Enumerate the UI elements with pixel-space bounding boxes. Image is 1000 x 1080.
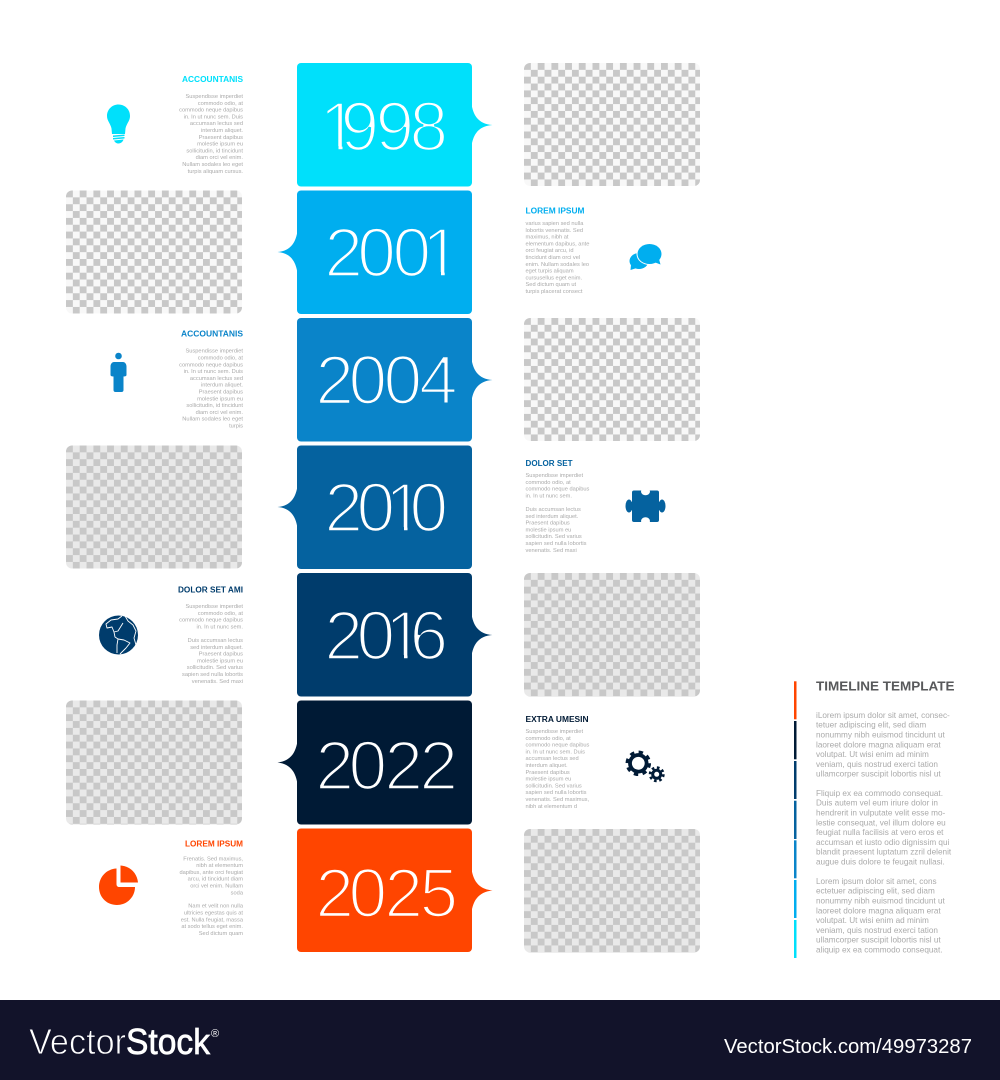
text block 2022 extra umesin: nibh at elementum d <box>526 804 577 810</box>
text block 2016 dolor set ami: in. In ut nunc sem. <box>197 624 243 630</box>
year block 2025 <box>297 828 492 952</box>
text block 2016 dolor set ami: Duis accumsan lectus <box>188 638 243 644</box>
text block 2004 accountanis <box>179 330 244 430</box>
sidebar text: laoreet dolore magna aliquam erat <box>816 906 941 915</box>
sidebar text: ullamcorper suscipit lobortis nisl ut <box>816 770 941 779</box>
text block 2001 lorem ipsum: enim. Nullam sodales leo <box>526 262 589 268</box>
text block 2010 dolor set: Suspendisse imperdiet <box>526 473 583 479</box>
icon: person <box>110 353 126 392</box>
text block 2016 dolor set ami: sed interdum aliquet. <box>190 645 243 651</box>
text block 2004 accountanis: molestie ipsum eu <box>197 396 243 402</box>
text block 2004 accountanis: Suspendisse imperdiet <box>185 349 243 355</box>
year block 2010 <box>278 446 472 569</box>
image placeholder left 6 <box>66 700 242 824</box>
text block 2022 extra umesin: interdum aliquet. <box>526 763 568 769</box>
text block 2025 lorem ipsum: nibh at elementum <box>196 863 243 869</box>
text block 2001 lorem ipsum: LOREM IPSUM <box>526 206 585 216</box>
text block 1998 accountanis: Praesent dapibus <box>199 135 243 141</box>
icon: pie chart <box>99 866 138 905</box>
text block 2025 lorem ipsum: Nam et velit non nulla <box>188 904 244 910</box>
text block 2016 dolor set ami: sapien sed nulla lobortis <box>182 672 243 678</box>
text block 2022 extra umesin: accumsan lectus sed <box>526 756 579 762</box>
text block 2016 dolor set ami: venenatis. Sed maxi <box>192 679 243 685</box>
year block 2004: 2004 <box>315 341 458 419</box>
text block 1998 accountanis: Suspendisse imperdiet <box>185 94 243 100</box>
year block 2022 <box>278 700 472 824</box>
sidebar text: iLorem ipsum dolor sit amet, consec- <box>816 711 950 720</box>
text block 2010 dolor set: sollicitudin. Sed varius <box>526 534 582 540</box>
footer logo: ® <box>211 1028 219 1040</box>
icon: puzzle piece <box>626 488 666 525</box>
year block 2016 <box>297 573 492 696</box>
year block 2001 <box>278 190 472 314</box>
text block 2022 extra umesin: sapien sed nulla lobortis <box>526 790 587 796</box>
sidebar text <box>816 711 952 954</box>
text block 2025 lorem ipsum: soda <box>231 890 244 896</box>
text block 2004 accountanis: in. In ut nunc sem. Duis <box>184 369 243 375</box>
text block 2010 dolor set: commodo odio, at <box>526 480 571 486</box>
text block 1998 accountanis <box>179 75 244 175</box>
sidebar text: Fliquip ex ea commodo consequat. <box>816 789 943 798</box>
image placeholder right 1 <box>524 63 700 186</box>
sidebar text: blandit praesent luptatum zzril delenit <box>816 848 952 857</box>
text block 2001 lorem ipsum: turpis placerat consect <box>526 289 583 295</box>
text block 2010 dolor set: venenatis. Sed maxi <box>526 548 577 554</box>
year block 2001: 2001 <box>324 213 461 291</box>
text block 2025 lorem ipsum: Frenatis. Sed maximus, <box>183 856 243 862</box>
text block 2001 lorem ipsum: lobortis venenatis. Sed <box>526 228 583 234</box>
sidebar text: volutpat. Ut wisi enim ad minim <box>816 916 929 925</box>
sidebar text: feugiat nulla facilisis at vero eros et <box>816 828 944 837</box>
text block 2025 lorem ipsum: orci vel enim. Nullam <box>190 884 243 890</box>
footer logo: Vector <box>29 1021 126 1062</box>
text block 2001 lorem ipsum: maximus, nibh at <box>526 235 569 241</box>
text block 2016 dolor set ami: molestie ipsum eu <box>197 658 243 664</box>
text block 2004 accountanis: turpis <box>229 424 243 430</box>
text block 1998 accountanis: commodo odio, at <box>198 101 243 107</box>
text block 2001 lorem ipsum: orci feugiat arcu, id <box>526 248 574 254</box>
text block 2025 lorem ipsum: Sed dictum quam <box>199 931 243 937</box>
image placeholder right 7 <box>524 829 700 952</box>
text block 2004 accountanis: accumsan lectus sed <box>190 376 243 382</box>
text block 2022 extra umesin: sollicitudin. Sed varius <box>526 783 582 789</box>
sidebar text: tetuer adipiscing elit, sed diam <box>816 721 926 730</box>
text block 1998 accountanis: interdum aliquet. <box>201 128 243 134</box>
year block 2022: 2022 <box>315 726 458 804</box>
sidebar text: aliquip ex ea commodo consequat. <box>816 945 943 954</box>
year block 2025: 2025 <box>315 854 458 932</box>
footer logo: Stock <box>126 1021 211 1062</box>
text block 2025 lorem ipsum: est. Nulla feugiat, massa <box>181 917 244 923</box>
footer bar <box>0 1000 1000 1080</box>
sidebar text: ectetuer adipiscing elit, sed diam <box>816 887 935 896</box>
sidebar text: hendrerit in vulputate velit esse mo- <box>816 809 946 818</box>
sidebar text: ullamcorper suscipit lobortis nisl ut <box>816 936 941 945</box>
text block 2022 extra umesin: Praesent dapibus <box>526 770 570 776</box>
text block 2022 extra umesin: molestie ipsum eu <box>526 777 571 783</box>
text block 2022 extra umesin: EXTRA UMESIN <box>526 715 589 724</box>
text block 1998 accountanis: sollicitudin, id tincidunt <box>186 148 243 154</box>
image placeholder left 2 <box>66 190 242 314</box>
year block 2010: 2010 <box>324 468 448 546</box>
year block 1998: 1998 <box>320 87 448 165</box>
text block 2010 dolor set: DOLOR SET <box>526 459 573 468</box>
footer logo <box>29 1021 219 1062</box>
sidebar text: accumsan et iusto odio dignissim qui <box>816 838 950 847</box>
text block 2001 lorem ipsum: cursusellus eget enim. <box>526 275 583 281</box>
text block 2025 lorem ipsum: dapibus, ante orci feugiat <box>179 870 243 876</box>
text block 1998 accountanis: molestie ipsum eu <box>197 142 243 148</box>
sidebar text: volutpat. Ut wisi enim ad minim <box>816 750 929 759</box>
text block 2025 lorem ipsum <box>179 840 244 937</box>
image placeholder right 5 <box>524 573 700 696</box>
text block 1998 accountanis: commodo neque dapibus <box>179 108 243 114</box>
text block 2016 dolor set ami: commodo odio, at <box>198 611 243 617</box>
text block 2016 dolor set ami: sollicitudin. Sed varius <box>187 665 243 671</box>
text block 2025 lorem ipsum: arcu, id tincidunt diam <box>188 877 243 883</box>
text block 2022 extra umesin: commodo neque dapibus <box>526 743 590 749</box>
sidebar text: laoreet dolore magna aliquam erat <box>816 740 941 749</box>
text block 2001 lorem ipsum: eget turpis aliquam <box>526 269 574 275</box>
text block 2010 dolor set: commodo neque dapibus <box>526 487 590 493</box>
text block 2016 dolor set ami: Suspendisse imperdiet <box>185 604 243 610</box>
text block 2001 lorem ipsum: Sed dictum quam ut <box>526 282 577 288</box>
sidebar text: lestie consequat, vel illum dolore eu <box>816 818 946 827</box>
text block 2016 dolor set ami: Praesent dapibus <box>199 652 243 658</box>
icon: globe <box>99 616 138 654</box>
text block 2025 lorem ipsum: LOREM IPSUM <box>185 840 243 848</box>
year block 1998 <box>297 63 492 186</box>
text block 2022 extra umesin: venenatis. Sed maximus, <box>526 797 589 803</box>
text block 2004 accountanis: sollicitudin, id tincidunt <box>186 403 243 409</box>
text block 2016 dolor set ami <box>178 586 243 685</box>
image placeholder right 3 <box>524 318 700 441</box>
text block 2025 lorem ipsum: at sodo tellus eget enim. <box>181 924 243 930</box>
image placeholder left 4 <box>66 446 242 568</box>
year block 2004 <box>297 318 492 442</box>
text block 2010 dolor set: Praesent dapibus <box>526 521 570 527</box>
text block 1998 accountanis: ACCOUNTANIS <box>182 75 244 84</box>
sidebar heading: TIMELINE TEMPLATE <box>816 678 955 694</box>
sidebar colour bar <box>794 681 796 958</box>
sidebar text: Lorem ipsum dolor sit amet, cons <box>816 877 937 886</box>
text block 2022 extra umesin: in. In ut nunc sem. Duis <box>526 749 585 755</box>
text block 2010 dolor set: in. In ut nunc sem. <box>526 493 572 499</box>
sidebar text: Duis autem vel eum iriure dolor in <box>816 799 938 808</box>
text block 2022 extra umesin: Suspendisse imperdiet <box>526 729 583 735</box>
sidebar text: augue duis dolore te feugait nullasi. <box>816 857 945 866</box>
text block 2025 lorem ipsum: ultricies egestas quis at <box>184 910 243 916</box>
text block 2016 dolor set ami: commodo neque dapibus <box>179 618 243 624</box>
text block 1998 accountanis: accumsan lectus sed <box>190 121 243 127</box>
footer image id: VectorStock.com/49973287 <box>724 1036 972 1058</box>
text block 2004 accountanis: diam orci vel enim. <box>196 410 243 416</box>
text block 2004 accountanis: commodo odio, at <box>198 356 243 362</box>
year block 2016: 2016 <box>324 596 448 674</box>
sidebar text: nonummy nibh euismod tincidunt ut <box>816 897 946 906</box>
text block 2010 dolor set: sapien sed nulla lobortis <box>526 541 587 547</box>
icon: speech bubbles <box>630 243 662 270</box>
icon: light bulb <box>107 104 130 144</box>
text block 2004 accountanis: Nullam sodales leo eget <box>182 417 243 423</box>
text block 2010 dolor set: molestie ipsum eu <box>526 527 571 533</box>
text block 2010 dolor set <box>526 459 590 554</box>
text block 2004 accountanis: Praesent dapibus <box>199 390 243 396</box>
text block 1998 accountanis: turpis aliquam cursus. <box>188 169 243 175</box>
text block 2016 dolor set ami: DOLOR SET AMI <box>178 586 243 594</box>
text block 2001 lorem ipsum: tincidunt diam orci vel <box>526 255 580 261</box>
text block 2001 lorem ipsum <box>526 206 589 295</box>
text block 2010 dolor set: sed interdum aliquet. <box>526 514 579 520</box>
sidebar text: veniam, quis nostrud exerci tation <box>816 760 938 769</box>
text block 2001 lorem ipsum: elementum dapibus, ante <box>526 241 589 247</box>
text block 2001 lorem ipsum: varius sapien sed nulla <box>526 221 584 227</box>
text block 2004 accountanis: commodo neque dapibus <box>179 362 243 368</box>
text block 2010 dolor set: Duis accumsan lectus <box>526 507 581 513</box>
text block 1998 accountanis: Nullam sodales leo eget <box>182 162 243 168</box>
text block 1998 accountanis: in. In ut nunc sem. Duis <box>184 114 243 120</box>
text block 1998 accountanis: diam orci vel enim. <box>196 155 243 161</box>
text block 2022 extra umesin: commodo odio, at <box>526 736 571 742</box>
sidebar text: nonummy nibh euismod tincidunt ut <box>816 731 946 740</box>
text block 2022 extra umesin <box>526 715 590 810</box>
text block 2004 accountanis: ACCOUNTANIS <box>181 330 244 338</box>
sidebar text: veniam, quis nostrud exerci tation <box>816 926 938 935</box>
text block 2004 accountanis: interdum aliquet. <box>201 383 243 389</box>
icon: gears <box>627 752 663 781</box>
